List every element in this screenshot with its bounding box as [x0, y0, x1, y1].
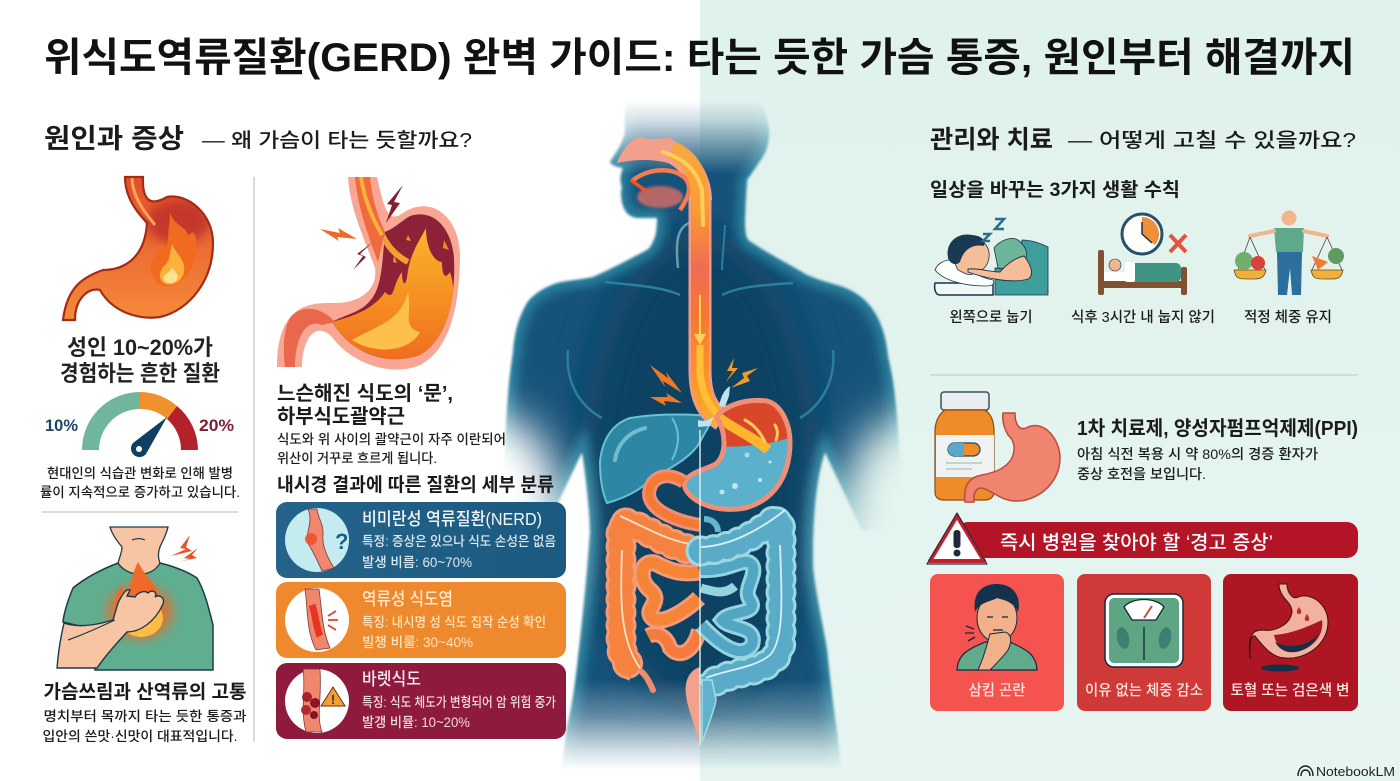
LES heading and text: [277, 382, 506, 466]
card: NERD: 비미란성 역류질환(NERD): [362, 509, 542, 529]
icon: person holding scales: [1234, 210, 1344, 295]
gauge chart: 20%: [199, 416, 234, 435]
body contour lines: [568, 225, 833, 418]
gauge chart: [45, 392, 234, 457]
esophagus with reflux: [663, 150, 765, 448]
label: healthy weight: 적정 체중 유지: [1244, 309, 1332, 326]
stat heading: 성인 10~20%가: [67, 335, 213, 360]
card: NERD: [276, 502, 566, 578]
icon: pill bottle: [935, 392, 994, 500]
icon: healthy stomach: [965, 413, 1060, 502]
large intestine orange half: [620, 516, 699, 690]
icon: sleeping on left side: [935, 219, 1048, 295]
card: Barrett esophagus: 특징: 식도 체도가 변형되어 암 위험 중가: [362, 695, 556, 710]
rectum orange: [686, 667, 700, 742]
classification heading: 내시경 결과에 따른 질환의 세부 분류: [277, 474, 554, 496]
brand mark: NotebookLM: NotebookLM: [1316, 765, 1395, 779]
icon: warning triangle: [927, 513, 987, 564]
symptom text: 가슴쓰림과 산역류의 고통: [44, 681, 246, 703]
card: reflux esophagitis: 빌챙 비룰: 30~40%: [362, 635, 473, 650]
card: NERD: 특정: 증상은 있으나 식도 손성은 없음: [362, 534, 556, 549]
LES heading and text: 위산이 거꾸로 흐르게 됩니다.: [277, 451, 437, 466]
card: weight loss: 이유 없는 체중 감소: [1085, 682, 1203, 699]
title: 위식도역류질환(GERD) 완벽 가이드: 타는 듯한 가슴 통증, 원인부터 해결까지: [44, 36, 1355, 80]
small intestine orange half: [642, 563, 699, 653]
heading: management and treatment: [930, 126, 1356, 154]
card: NERD: 발생 비름: 60~70%: [362, 555, 472, 570]
icon: stomach with flames and LES: [277, 177, 460, 370]
heading: management and treatment: — 어떻게 고칠 수 있을까요?: [1068, 129, 1356, 152]
heading: causes and symptoms: — 왜 가슴이 타는 듯할까요?: [202, 129, 472, 152]
stat description: 률이 지속적으로 증가하고 있습니다.: [40, 485, 240, 500]
heading: causes and symptoms: [44, 124, 472, 154]
LES heading and text: 하부식도괄약근: [277, 405, 405, 428]
duodenum: [649, 476, 700, 525]
icon: burning stomach: [63, 177, 213, 320]
icon: clock and bed: [1098, 214, 1187, 295]
PPI heading and text: [1077, 417, 1358, 482]
card: NERD: ?: [335, 529, 348, 554]
oral and nasal cavity: [617, 137, 712, 268]
card: Barrett esophagus: [276, 663, 566, 739]
icon: pain sparks left: [650, 365, 682, 406]
central anatomy illustration: [490, 90, 910, 781]
card: vomiting blood or black stool: [1223, 574, 1358, 711]
card: reflux esophagitis: 역류성 식도염: [362, 589, 453, 609]
label: sleep left: 왼쪽으로 눕기: [950, 309, 1032, 326]
background: right mint half: [700, 0, 1400, 781]
heading: causes and symptoms: 원인과 증상: [44, 124, 184, 154]
icon: pain sparks right: [725, 358, 758, 388]
card: reflux esophagitis: 특징: 내시명 성 식도 집작 순성 확인: [362, 615, 546, 630]
warning banner: 즉시 병원을 찾아야 할 ‘경고 증상’: [1000, 532, 1273, 554]
human body silhouette: [490, 90, 910, 781]
stat description: 현대인의 식습관 변화로 인해 발병: [47, 466, 233, 481]
card: difficulty swallowing: [930, 574, 1064, 711]
label: no lying after meal: 식후 3시간 내 눕지 않기: [1071, 309, 1215, 326]
card: Barrett esophagus: 바렛식도: [362, 669, 421, 689]
card: vomiting blood or black stool: 토혈 또는 검은색 변: [1230, 682, 1350, 699]
large intestine blue half: [701, 510, 785, 742]
stat description: [40, 466, 240, 500]
stat heading: 경험하는 흔한 질환: [60, 361, 220, 386]
symptom text: 명치부터 목까지 타는 듯한 통증과: [44, 709, 247, 724]
gauge chart: 10%: [45, 416, 78, 435]
background: left white half: [0, 0, 700, 781]
card: weight loss: [1077, 574, 1211, 711]
heading: management and treatment: 관리와 치료: [930, 126, 1053, 154]
card: Barrett esophagus: 발갱 비뮬: 10~20%: [362, 715, 470, 730]
card: difficulty swallowing: 삼킴 곤란: [968, 682, 1026, 699]
PPI heading and text: 아침 식전 복용 시 약 80%의 경증 환자가: [1077, 446, 1318, 462]
small intestine blue half: [701, 562, 753, 651]
card: Barrett esophagus: !: [331, 692, 335, 707]
LES heading and text: 느슨해진 식도의 ‘문’,: [277, 382, 453, 405]
card: reflux esophagitis: [276, 582, 566, 658]
stat heading: [60, 335, 220, 386]
icon: pain sparks around stomach: [320, 185, 403, 270]
symptom text: [42, 681, 247, 744]
PPI heading and text: 1차 치료제, 양성자펌프억제제(PPI): [1077, 417, 1358, 440]
arrow: reflux direction: [694, 295, 706, 345]
sphincter opening: [698, 386, 730, 427]
symptom text: 입안의 쓴맛·신맛이 대표적입니다.: [42, 729, 238, 744]
LES heading and text: 식도와 위 사이의 괄약근이 자주 이란되어: [277, 432, 506, 447]
center split line: [699, 430, 701, 745]
PPI heading and text: 중상 호전을 보입니다.: [1077, 466, 1206, 482]
liver: [600, 414, 713, 503]
stomach with acid: [682, 398, 792, 512]
icon: person with heartburn: [57, 527, 213, 670]
heading: lifestyle rules: 일상을 바꾸는 3가지 생활 수칙: [930, 179, 1180, 201]
warning banner: [957, 522, 1358, 558]
